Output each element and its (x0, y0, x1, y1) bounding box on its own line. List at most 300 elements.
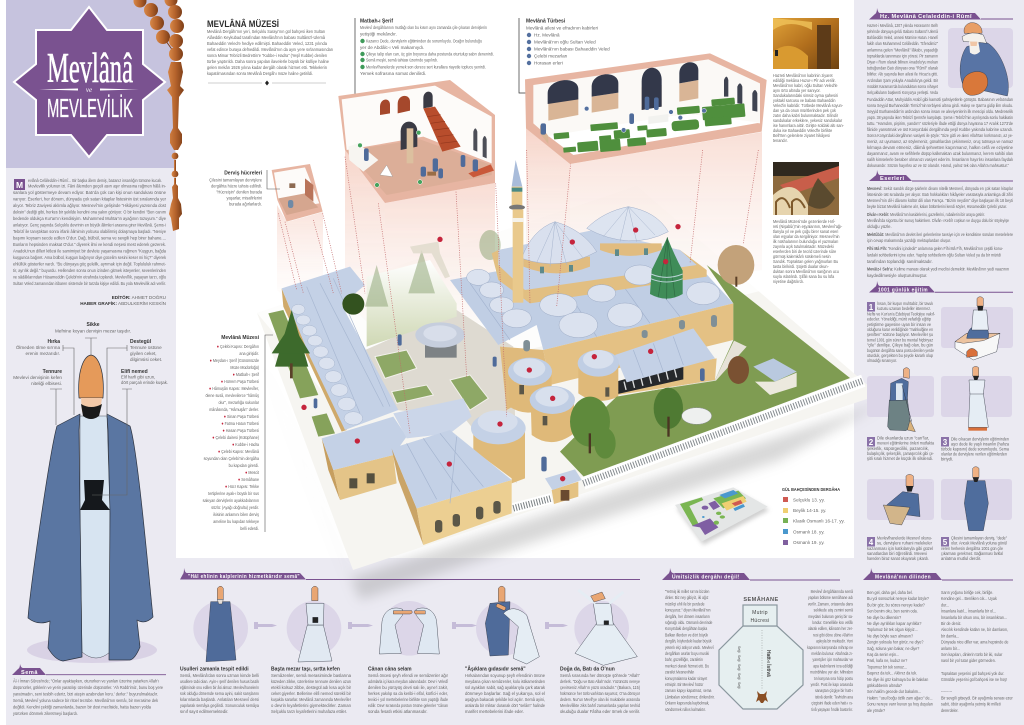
text block: museum photo caption: eserlerden biri de tecrid üzerinde sûre (773, 249, 837, 254)
semâ column 5: derlerk. "Doğu ve Batı Allah'ındır. Yüzünüzü nereye (560, 679, 641, 684)
text block: poem left: Hakim: "usul boğu özlik zam ağacı" de... (867, 695, 933, 700)
text block: Semâ: Semâ, Mevlevî yoluna sadece bir ritüel tecrübe. Mevlânâ'nın semâı, bir merasime dek (13, 698, 159, 703)
text block: poem left: Ben gel, daha gel, daha bel. (867, 590, 913, 595)
semâ column 4: sol ayakları sabit, sağ ayaklarıyla çark atarak (465, 685, 546, 690)
text block: poem right: Gönülde yeşerini gül bahçesi ise ne hoş! (941, 677, 1007, 682)
step 5: text: çıkarması gerekmez. Bağlanması farklal (941, 551, 1003, 556)
text block: poem right (941, 590, 1013, 713)
text block: poem left: Sağ, soluna yan bakar, ne diye? (867, 646, 920, 651)
text block: Hz. Mevlana biography: salih kimselerle beraber olmanızı vasiyet ederim. İnsanların hayırlısı insanlara faydalı (867, 157, 1013, 162)
text block: poem left: Bu yol sonsuzluk nereye kadar böyle? (867, 596, 930, 601)
text block: poem left: Ne diye bu dikensin? (867, 615, 902, 620)
semâ column 1: Semâ, Mevlânâ'dan sonra uzman kimde belli (180, 673, 259, 678)
semâ column 2: ceket giyerler. Bellerine elifi nemed sürekli bir (271, 691, 352, 696)
text block: tomb photo caption: zatın daha kabri bulunmaktadır. Silindir (773, 113, 839, 118)
semâ column 3: Semâ öncesi şeyh efendi ve semâzenler ağır (368, 673, 449, 678)
black sash (80, 480, 110, 510)
text block: poem right: Topraktan yeşerini gül bahçesi yok dur. (941, 671, 1004, 676)
text block: museum legend list: sakıyan dervişlerin ayakkabılarının (203, 498, 260, 503)
step 2: text: mevevi eğitimlerine önleri mutfakta (877, 440, 935, 446)
arches (380, 92, 433, 150)
text block: Hz. Mevlana biography: Bahâeddin Veled, annesi Mümine Hatun. Hanefi (867, 35, 938, 40)
text block: poem left: Sen hakîm gecede dur bakalım... (867, 689, 921, 694)
text block: tomb photo caption: edildiği mekâna Huzur-ı Pîr adı verilir. (773, 78, 836, 83)
step 1: text: olmadığı sınanıyor. (867, 358, 897, 363)
drum tower left (508, 358, 552, 413)
step 4: text: sanatlardan biri öğretilirdi. Mevevi (867, 551, 927, 556)
museum cutaway drawing (250, 128, 884, 600)
text block: Umitsizlik right: mutrıbhâne yer alır. Mihrabın (810, 670, 853, 675)
text block: museum legend list: ● Matbah-ı Şerif (233, 372, 260, 377)
text block: museum legend list: ikisinin anlamını bilen derviş (213, 512, 259, 517)
semâ column 4: marifet mertebelerini ifade eder. (465, 709, 524, 714)
building complex (268, 150, 863, 545)
text block: poem right: Dünyada nice diller var, ama hepsinde de (941, 639, 1009, 645)
text block: Umitsizlik left: dinler. Biz ney gibiyiz, iki ağız (665, 596, 709, 600)
text block: museum legend list: ● Kubbe-i Hadra (232, 442, 260, 447)
semazen marks (737, 646, 741, 689)
pink projection columns (277, 128, 762, 340)
text block: poem right: Bir sevgili gitseydi. Bir ayağımla senası ezer (941, 695, 1013, 700)
text block: introduction: alıyor. Tebriz Zaviyesi aklımla ağlıyor. Mesnevî'nin gelişinde "Hikâyesi yazısında dost (13, 203, 167, 208)
gazebo (415, 322, 465, 358)
mini site map (675, 487, 769, 545)
text block: poem right: İnsanlarla bir olsun onu, bir insanlıkran... (941, 615, 1007, 620)
drop cap: M (16, 180, 23, 190)
text block: poem right: anlamı bir... (941, 646, 960, 651)
text block: Eserleri: olduğu yüzle. (867, 224, 892, 229)
photo: museum interior (773, 162, 839, 215)
panel: title block (6, 0, 175, 168)
step 2: illustration (867, 368, 934, 432)
shadow ellipse (27, 637, 157, 663)
text block: introduction: Mevlevilik yolunun izi. Fâni âlemden geçeli asırı aşır olmasına rağmen hâlâ in- (28, 184, 166, 188)
text block: Umitsizlik left: bahr, güzellliğin, zarafetin (665, 658, 703, 662)
Dervish cell cutaway (272, 164, 323, 222)
text block: Mevlana Turbesi: Hz. Mevlânâ (534, 32, 560, 38)
title: ve: ve (86, 86, 92, 94)
left lawns (268, 310, 318, 398)
text block: poem right: İnsanlara katıl... İnsanlarla bir ol... (941, 608, 996, 614)
text block: poem right: --------- (941, 689, 953, 694)
text block: Hz. Mevlana biography: Hazret-i Mevlânâ, 1207 yılında Horasan'ın Belh (867, 23, 939, 28)
semâ column 1: eğitiminde onu edilen bir âsi almaz. Mevlevîhanelerin (180, 685, 260, 690)
text block: Hz. Mevlana biography (867, 23, 1014, 168)
text block: Mevlana Turbesi: Mevlânâ ailesi ve efradının kabirleri (526, 26, 598, 30)
legend: periods: Osmanlı 18. yy. (793, 530, 825, 534)
semâ column 3: herkes yakılıp sa da keribi-i elfal, kürfici-i eder, (368, 691, 448, 696)
text block: museum legend list: Müze Müdürlüğü) (230, 365, 260, 370)
text block: tomb photo caption: Veled'in kabridir. Türbede Mevlânâ soyun- (773, 103, 844, 108)
text block: dervish cells: Derviş hücreleri (224, 170, 263, 176)
semâ column 3: edilir. Devr sırasında postun önüne gelenler "cânan (368, 703, 449, 708)
text block: Umitsizlik right: aşkıyla bir mektedir. Yeni (816, 639, 853, 644)
text block: museum legend list: ana girişidir. (239, 351, 259, 356)
step 5: text: veren herkesin dergâhta 1001 gün çile (941, 546, 1004, 551)
step 2: text: şekerlik, süpürgeciliki, pazarcılık, (867, 446, 929, 451)
text block: Umitsizlik right (807, 590, 854, 712)
front fence right (583, 381, 863, 483)
callout labels: dervish garments: erenin mezarıdır. (26, 351, 60, 356)
title: Mevlana: Mevlânâ (47, 46, 133, 92)
credits: HABER GRAFİK: ABDULKERİM KESKİN (80, 300, 166, 306)
step 4: text: kazanması için katkılarıyla gibi güzel (867, 546, 933, 551)
text block: museum photo caption: görmüş kalemkârlı süslemeli nesin (773, 254, 831, 259)
semâ column 2: etekli kolsuz zibbe, destegül adı kısa açık bir (271, 685, 352, 690)
callout labels: dervish garments: Tennure (43, 369, 62, 375)
text block: Hz. Mevlana biography: anlamına gelen "Mevlânâ" lâkabı, yaşadığı (867, 47, 938, 52)
text block: Umitsizlik right: olarak edilen, kâinatın her zer- (808, 627, 854, 631)
text block: museum legend list: ● Hücr Kapısı: Tekke (225, 484, 260, 489)
legend: periods: Klasik Osmanlı 16-17. yy. (793, 518, 845, 524)
main wall (543, 303, 733, 385)
main front block (392, 448, 423, 545)
text block: Hz. Mevlana biography: dayanmanız, avam ve sefihlerle düşüp kalkmaktan uzak bulunmanız, kerem sahibi olan (867, 151, 1014, 156)
semâ column 2: kuşakla sararlar. Mevlânâ zamanında Mevlevîler (271, 697, 352, 702)
text block: Matbah-i Serif (354, 18, 494, 106)
semâ column 3: denilen bu yürüyüş devri salı ile, ayne'i zakir, (368, 685, 448, 690)
text block: Umitsizlik right: apa kadınlarıni icra edildiği (813, 664, 853, 669)
text block: Eserleri: kaydedilmesiyle oluşturulmuştur. (867, 273, 927, 278)
step 1: text: kuzusu uzanan bedeller istenmez. (877, 306, 931, 311)
callout labels: dervish garments: Hırka (47, 339, 60, 345)
text block: poem right: Kendine gel... Benliken cık... Uyak (941, 596, 997, 601)
text block: Mevlana Turbesi (519, 18, 610, 93)
title: ve (39, 86, 139, 94)
text block: museum legend list: ● Sinan Paşa Türbesi (224, 414, 259, 419)
text block: museum legend list: bu kapıdan girerdi. (229, 463, 259, 468)
step 3: text (941, 436, 1010, 462)
text block: museum legend list: ölene susâ, mevlevilerce "hâmûş (205, 393, 259, 398)
semâ column 1: sok olduğu dönemde sema ayini, sakit sarışlarını (180, 691, 259, 696)
text block: Umitsizlik left: dergâhı, her dönem insanların (665, 614, 710, 619)
text block: Eserleri: Dîvân-ı Kebîr: Mevlânâ'nın kasidelerini, gazellerini, rubailerini bir araya getirir. (867, 212, 985, 217)
cloak right (107, 414, 153, 660)
text block: Hz. Mevlana biography: müddet Karaman'da bulunduktan sonra nihayet (867, 84, 939, 89)
right lawn (560, 265, 850, 478)
text block: poem right: bir damla... (941, 633, 959, 638)
text block: introduction: ehlüllük gösteriler vardı. "Bu dünyaya göç gelelik, ayrımak için değil. Toplululuk rahmet- (13, 262, 166, 266)
text block: museum legend list: belli ederdi. (240, 526, 259, 531)
text block: poem right: dur... (941, 602, 949, 607)
text block: Umitsizlik right: sekikede atış zemini semâ (814, 608, 854, 613)
step 2: text: Dile okanlarda uzun "can"lar, (877, 436, 929, 440)
legend: periods: Beylik 14-15. yy. (793, 508, 826, 513)
text block: museum photo caption: duktan sonra Mevlânâ'nın sarığının ucu (773, 269, 839, 274)
text block: introduction: Tebrizî ile tanıştıktan sonra irfanlı âlimimin yolcusu olabilirmiş dolaşmaya başladı. "Neniye (13, 229, 166, 234)
text block: Umitsizlik right: istivâ denilir. Tevhidin ana (815, 695, 854, 700)
text block: Hz. Mevlana biography: tuttuğundan Batı dünyası ona "Rûmî" olarak (867, 66, 939, 71)
tan wall strips (548, 98, 578, 121)
text block: Umitsizlik right: verilir. Zamanı, ortasında dans (808, 602, 853, 607)
semâ column 1: usullere tabi olan. Ayin-ı şerif denilen husus bazik (180, 679, 260, 684)
small roof domes (467, 265, 720, 338)
text block: museum legend list: ● Hâmuşân Kapısı: Mevlevîler, (209, 386, 259, 391)
step 1: text: şeniften" sözüne başlıyor. Mevlevîler şu (867, 332, 934, 337)
text block: Mevlana Turbesi: Horasan erleri (534, 60, 563, 66)
section tab: Umitsizlik: Ümitsizlik dergâhı değil! (672, 574, 740, 580)
figure 4 embrace (485, 586, 539, 664)
text block: museum photo caption: niyetine dağıtılırdı. (773, 279, 804, 284)
text block: museum photo caption: zayınla açık tutulmaktadır. Müzedeki (773, 244, 834, 249)
text block: Mevlana Museum: Mevlânâ Dergâhı'nın yeri, Selçuklu Sarayı'nın gül bahçesi iken Sultan (207, 29, 325, 34)
text block: Umitsizlik left: Onların kapısında kaybolmak, (665, 701, 709, 706)
step 1: text: 1 (869, 303, 874, 312)
semâ column 5: Semâ sırasında her dönüşte şöhrede "Allah" (560, 673, 640, 678)
callout labels: dervish garments: Mefnine koyan dervişin mezar taşıdır. (55, 328, 131, 334)
text block: dervish cells: "Hücreişin" denilen burada (216, 189, 263, 195)
step 3: text: olanlar de dervişlere verilen eğitimlerden (941, 452, 1008, 456)
text block: Umitsizlik right: tın karşına sıra hizip postu (814, 676, 853, 681)
green tombs (552, 97, 747, 156)
semâ column 4 (465, 666, 546, 714)
text block: museum photo caption: reti (Nişabûr)'nin eşyalarının, Mevlevî'ağı- (773, 224, 843, 229)
callout labels: dervish garments: niteliği elbisesi. (31, 381, 62, 386)
text block: poem right: Akıcılık kendinde katları ne, bir damlasın, (941, 627, 1008, 632)
text block: Eserleri (867, 186, 1014, 278)
text block: Matbah-i Serif: Matbah-ı Şerif (360, 18, 393, 24)
step 3: text: 3 (943, 438, 948, 447)
Turbe room cutaway (525, 53, 767, 164)
text block: poem left: Topumuz bir tek sonuz... (867, 664, 907, 669)
step 4: illustration (867, 474, 934, 525)
text block: Mevlana Museum: Bahaeddin Veled'e hediye edilmişti. Bahaeddin Veled, 1231 yılında (207, 41, 327, 46)
semâ steps illustration (193, 586, 637, 665)
semâ column 3: teviici-i yol mertebelerine birlikte son yaptığı ifade (368, 697, 449, 702)
text block: Umitsizlik right: yerdir. Post ile kapı arasında (811, 683, 854, 687)
text block: museum photo caption: ilk nüshalarının bulunduğu el yazmaları (773, 239, 838, 244)
semâ column 5 (560, 666, 641, 714)
text block: museum legend list: ● Çelebi Kapısı: Mevlânâ (218, 449, 260, 454)
text block: Umitsizlik left: Balkan illerden ve dört büyük (665, 633, 708, 638)
figure 5 whirling (575, 590, 637, 665)
small figures (314, 334, 705, 471)
photo: tomb interior (773, 18, 839, 69)
text block: poem right: Sen kapıları, dinlerin türlü bir iki, sular (941, 652, 1003, 657)
text block: dervish cells: Çilesini tamamlayan dervişlere (209, 177, 263, 183)
text block: poem left: Sen benim oku, ben senin oda. (867, 608, 918, 614)
callout labels: dervish garments: Tennure üstüne (130, 345, 162, 350)
text block: museum legend list: olur", mezarlığa sukunlar (218, 400, 260, 405)
text block: Mevlana Museum: türbe yaptırıldı. Daha sonra yapılan ilavelerle büyük bir külliye haline (207, 59, 329, 64)
text block: Eserleri: Mevâiz-i Seb'a: Kelime manası olarak yedi meclisi demektir. Mevlânâ'nın yedi vaazının (867, 266, 1010, 272)
text block: Umitsizlik left: zamanı kapıyı kapatmaz, sema (665, 689, 712, 693)
step 3: text: türbde kapısını) dede sorumluydu. Sema (941, 446, 1010, 452)
text block: poem right: Bir de deniz. (941, 621, 961, 626)
text block: museum photo caption: tasta birikirdi. Şüjetti dualar okun- (773, 264, 829, 269)
text block: Umitsizlik right: resi gibi döne döne Allah'ın (813, 633, 853, 638)
text block: Eserleri: için cevap makamında yazdığı mektuplardan oluşur. (867, 238, 951, 243)
text block: Hz. Mevlana biography: dokunandır. Sözün hayırlısı az ve öz olandır. Hamd, yalnız tek olan Allah'a mahsustur." (867, 163, 1009, 168)
text block: Mevlana Museum: gelen mekân 1926 yılına kadar dergâh olarak hizmet etti. Tekkelerin (207, 65, 327, 70)
text block: Umitsizlik right: sanaştan çizgiye bir hatt-ı (815, 689, 853, 693)
text block: Mevlana Turbesi: Mevlânâ'nın oğlu Sultan Veled (534, 40, 596, 44)
section tab: Eserleri: Eserleri (880, 176, 905, 182)
red numbered markers (301, 224, 681, 481)
text block: tomb photo caption: dan ya da onun müritlerinden pek çok (773, 108, 836, 113)
step 1: text: Nefis ve Kur'an'a Edebiyat Teolojiye vakıf- (867, 311, 936, 316)
main roof (450, 263, 733, 350)
text block: Umitsizlik right: çizgisini ifade eden hatt-ı ıs- (811, 701, 854, 706)
text block: Mevlana Museum: Alâeddin Keykubad tarafından Mevlânâ'nın babası Sultânü'l-Ulemâ (207, 35, 325, 40)
text block: Matbah-i Serif: yetiştiği mekândır. (360, 32, 397, 36)
text block: Hz. Mevlana biography: tuttu. "Hamdım, pişirim, yandım" sözleriyle ifade ettiği dünya hayatına 17 Aralık 1273'de (867, 121, 1014, 126)
semâ column 2: Selçuklu tarzı kıyafetlerini muhafaza ettiler. (271, 709, 347, 714)
callout labels: dervish garments: dört parçalı erinde kuşak. (121, 380, 168, 385)
text block: Eserleri: lardaki sohbetlerini içine eder. Yapılıp sohbetlerin oğlu Sultan Veled ya da bir müridi (867, 252, 1001, 258)
text block: introduction: varıyor. Eserleri, her dönem, dünyada çok satan kitaplar listesinin üst sıralarında yer (13, 196, 166, 202)
figure 2 white robe (298, 586, 332, 662)
step 4: text (867, 536, 933, 561)
text block: museum legend list: ● Semâhane (238, 477, 260, 482)
callout labels: dervish garments: Destegül (130, 339, 152, 345)
step 4: text: su, dervişlere ruhani melekeler (877, 540, 933, 546)
step 1: text: yetiştirme gayesine uyan bir insan ve (867, 322, 932, 327)
courtyard ground (365, 310, 517, 483)
text block: Umitsizlik left: etmiştir. Bir Mevlevî hüzür (665, 683, 704, 687)
text block: introduction (13, 178, 167, 286)
text block: tomb photo caption: Belh'ten gelenlere ziyaret hikâyesi (773, 133, 830, 138)
text block: Hz. Mevlana biography: bilirler. Altı yaşında iken ailesi ile Hicaz'a gitti. (867, 72, 938, 77)
callout labels: dervish garments (13, 322, 168, 495)
text block: introduction: ve sâdâklarından Hüsameddin Çelebi'nin etrafında toplandı. Mevlevîlik, yaşayan tarzı, oğlu (13, 274, 166, 280)
panel: bottom band (176, 558, 1024, 725)
bench (348, 143, 378, 172)
text block: Hz. Mevlana biography: şehrinde dünyaya geldi. Babası Sultanü'l Ulemâ (867, 29, 939, 34)
step 2: text (867, 436, 935, 461)
text block: museum legend list: ● Meydan-ı Şerif (Günümüzde (210, 358, 260, 363)
panel: left column (6, 0, 176, 725)
trees (272, 245, 754, 459)
text block: introduction: Bunların hepsinden maksat O'dur." diyerek ilmi ve kendi neşesi mest ederek gezerek. (13, 242, 166, 247)
text block: Hz. Mevlana biography: topraklarda tanınması için yöresi. Pir zamanın (867, 53, 939, 58)
mutrip box: Mutrip (752, 610, 768, 616)
text block: introduction: anlatıyor. Genç yaşında Selçuklu devrinin en büyük âlimleri arasına girer Mevlânâ. Şems-i (13, 222, 166, 228)
semâ column 5: hükmünce her türlü varlıktan sayarsız, O'na dönüyor (560, 691, 640, 696)
text block: introduction: başımı koysam secde edilen O'dur. Dağ, bülbül, sema ve sevgili hep birer bahane.... (13, 236, 166, 240)
large dome 2 (587, 207, 668, 256)
text block: museum photo caption: tlarıyla yıl ve pek çoğu birer sanat eseri (773, 229, 838, 234)
text block: Mevlana Turbesi: Çelebi mezarları (534, 54, 567, 58)
callout labels: dervish garments: Sikke (86, 322, 100, 328)
cloak left (28, 414, 82, 661)
semazen marks: Seği (737, 673, 741, 680)
semâ column 3: sonda fesatlı etkisi atlanmasıdır. (368, 709, 428, 714)
text block: tomb photo caption: ise hanımlara aittir. Girişte soldaki altı san- (773, 123, 844, 128)
text block: Umitsizlik left: yetenlı elçi atılıyor vardı. Mevlevî (665, 645, 714, 650)
title star badge (14, 7, 165, 157)
text block: Matbah-i Serif: Yemek sofrasına somat denilirdi. (360, 71, 426, 76)
figure 1 cloak (206, 586, 236, 662)
semâ column 1: sınıf sayıt edilmemektedir. (180, 709, 228, 714)
section tab: Hz. Mevlana (869, 8, 1013, 20)
text block: poem left: Pasl, kafa ne, kuduz ne? (867, 658, 908, 663)
text block: Umitsizlik right: yaretçiler için mahsuslar ve (813, 658, 853, 662)
stairs (423, 107, 461, 152)
step 3: text: biriydi. (941, 456, 953, 462)
text block: Mevlana Museum: kapatılmasından sonra Mevlânâ Dergâhı müze haline getirildi. (207, 71, 313, 76)
text block: tomb photo caption: Hazreti Mevlânâ'nın kabrinin ziyaret (773, 73, 833, 78)
icon: post skin (756, 691, 768, 703)
column (407, 128, 413, 163)
text block: Matbah-i Serif: Kazancı Dede, dervişlerin eğitiminden de sorumluydu. Ocağın bulunduğu (366, 38, 482, 44)
robe (80, 416, 110, 658)
text block: museum legend list: ● Çelebi Kapısı: Dergâhın (217, 344, 260, 349)
section tab: Mevlana'nin dilinden: Mevlânâ'nın dilinden (875, 574, 931, 580)
tower (471, 410, 526, 483)
large dome 1 (522, 222, 597, 273)
text block: poem left: Ne diye iki göz kalmaya bu ile bakılan (867, 677, 928, 682)
text block: poem right: nasıl bir yol tutar gider görmeden. (941, 658, 996, 663)
panel: right column (854, 0, 1024, 725)
credits: EDİTÖR: AHMET DOĞRU (112, 294, 166, 300)
text block: museum legend list: sözlü: (Ayağı doğrultu) yerdir. (211, 505, 259, 510)
text block: introduction: kuşgunca bağıret. Ama bülbül, kuşgun bağırıyor diye gücelim sesini keser mi hiç?" diyerek (13, 255, 167, 260)
step 1: text: temel 1001 gün sürer bu mental hiçbiryaz (867, 337, 933, 342)
section tab: Mevlana'nin dilinden (863, 568, 1013, 580)
text block: Matbah-i Serif: Semâ meşki, semâ tahtası üzerinde yapılırdı. (366, 58, 438, 62)
semâ column 5: Mevlevîlikte ziks bahrî zamanlarda yapılan tevhid (560, 703, 641, 708)
small figures (541, 97, 659, 135)
text block: poem left (867, 590, 933, 713)
callout labels: dervish garments: dilgimsisi ceket. (130, 357, 162, 362)
text block: Matbah-i Serif: Mevlevîhanelerde yemek son derece sert kurallara riayetle toplucu yenirdi. (366, 64, 486, 70)
upper mosque platform (492, 233, 707, 303)
faded back trees (365, 230, 501, 307)
semazen marks: Seği (737, 682, 741, 689)
text block: poem left: ale yönde? (867, 708, 886, 713)
text block: dervish cells: dergâhta hücre tahsis edilirdi. (211, 183, 262, 189)
text block: Semâ: değildi. Kendini çektiği zamanlarda, bazen bir dost mecliside, hatta bazen yolda (13, 704, 151, 710)
text block: poem left: Ne diye böyle sazı almasın? (867, 633, 914, 638)
callout labels: dervish garments: Ölmeden ölme sırrına (16, 344, 60, 350)
semâ column 2 (271, 666, 352, 714)
section tab: Semâ (12, 664, 166, 676)
head: sikke (79, 355, 103, 398)
text block: Hz. Mevlana biography: Ardından Şam yoluyla Anadolu'ya geldi. Bir (867, 78, 939, 83)
text block: Umitsizlik left: zarafet Mesnevihân (665, 670, 694, 675)
callout labels: dervish garments: Elifî nemed (121, 369, 148, 375)
front fence left slats (513, 498, 552, 508)
section tab: Hal ehlinin (180, 568, 640, 580)
text block: Umitsizlik left: sığınağı oldu. Osmanlı devrinde (665, 621, 712, 625)
text block: museum legend list: ● Hasan Paşa Türbesi (223, 428, 259, 433)
text block: museum legend list: ● Mescit (245, 470, 260, 475)
text block: museum photo caption: Sandık. Topraktan gelen yağmurları Bu (773, 259, 838, 264)
fountain (682, 408, 712, 424)
arrows between semâ steps (254, 622, 568, 629)
text block: Hz. Mevlana biography: kılmaya devam etmeniz, dâimâ şehvetten kaçınmanız, halkın cefâ ve eziyetine (867, 145, 1014, 150)
text block: Mevlana Turbesi: Mevlânâ Türbesi (526, 18, 566, 24)
text block: Mevlana Turbesi: Mevlânâ'nın babası Bahaeddin Veled (534, 46, 610, 52)
text block: poem left: Zengin yoksula hor görür, ne diye? (867, 639, 924, 645)
step 2: text: 2 (869, 438, 874, 447)
step 4: text: hareden biraz sanat okuyarak çıkardı. (867, 556, 929, 561)
text block: Umitsizlik left: Konya'daki dergâhtan başka (665, 627, 708, 631)
carpet (468, 164, 494, 177)
text block: poem left: gökkubbenin altında? (867, 683, 903, 688)
section tab: Hal ehlinin: "Hâl ehlinin kalplerinin hizmetkârıdır semâ" (188, 574, 300, 580)
text block: introduction: deksin" dediği gibi, herkes bir şekilde kendini ona yakın görüyor. O bir kendini "Ben canım (13, 210, 166, 214)
text block: Mevlana Museum: sonra Mimar Tebrizli Bedrettin'e "Kubbe-i Hadra" (Yeşil Kubbe) denilen (207, 53, 327, 58)
semâ column 4: aşağıya bakacak şekilde kol açılır. Semâ ayini, (465, 697, 545, 702)
wall slits (473, 128, 487, 158)
text block: museum photo caption: olan eşyalar da sergiliniyor. Mesnevî'nin (773, 234, 840, 239)
section tab: 1001 days: 1001 günlük eğitim (878, 288, 928, 294)
figure: dervish garment diagram (27, 355, 157, 663)
text block: museum legend list: Mevlânâ Müzesi (221, 335, 260, 341)
step 3: text: aşcı dede ile yaşlı insanlın (hafıza (951, 442, 1010, 446)
